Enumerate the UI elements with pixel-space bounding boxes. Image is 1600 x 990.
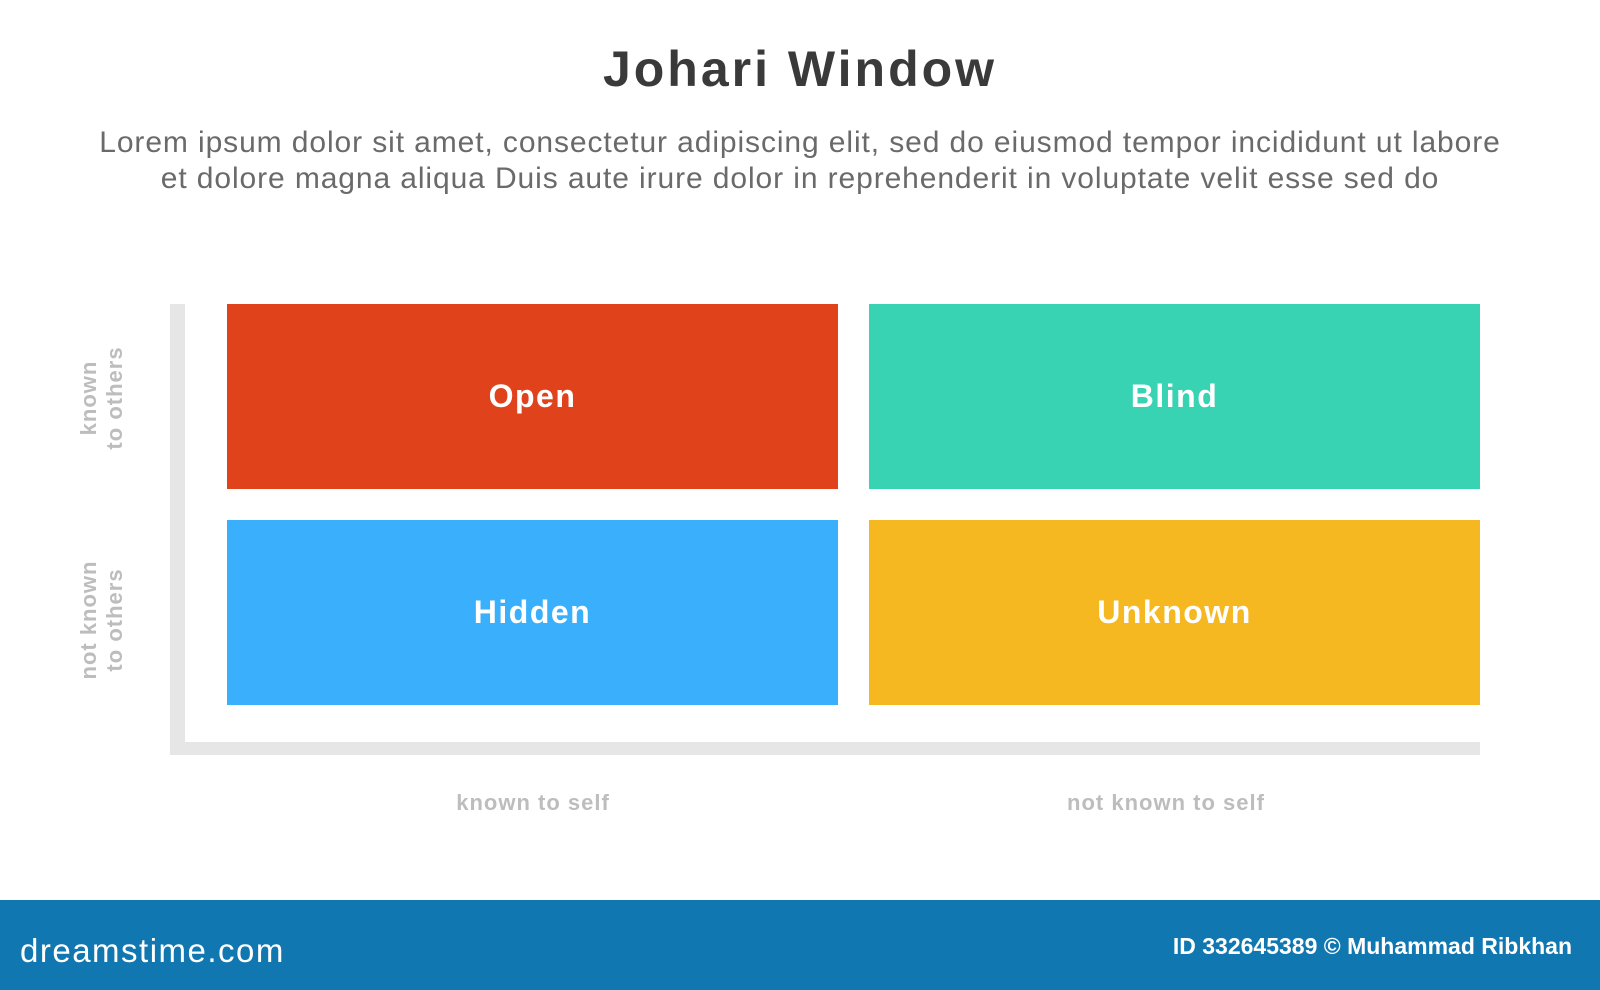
- label: not known to others: [76, 561, 127, 680]
- label: known to others: [76, 346, 127, 450]
- footer logo: dreamstime.com: [20, 932, 285, 969]
- label: not known to self: not known to self: [1067, 790, 1265, 815]
- footer: [0, 900, 1600, 990]
- box: open: Open: [489, 378, 576, 414]
- subtitle: Lorem ipsum dolor sit amet, consectetur adipiscing elit, sed do eiusmod tempor incididunt ut labore: [99, 126, 1501, 159]
- footer credit: ID 332645389 © Muhammad Ribkhan: [1173, 933, 1572, 959]
- box: hidden: Hidden: [474, 594, 591, 630]
- axis: [170, 304, 1480, 755]
- label: not known to others: not known: [76, 561, 101, 680]
- subtitle: et dolore magna aliqua Duis aute irure dolor in reprehenderit in voluptate velit esse sed do: [161, 162, 1439, 195]
- title: Johari Window: [603, 41, 997, 97]
- subtitle: [99, 126, 1501, 195]
- label: known to others: to others: [102, 346, 127, 450]
- box: unknown: [869, 520, 1480, 705]
- box: open: [227, 304, 838, 489]
- box: blind: Blind: [1131, 378, 1218, 414]
- box: hidden: [227, 520, 838, 705]
- label: known to self: known to self: [456, 790, 610, 815]
- box: blind: [869, 304, 1480, 489]
- label: known to others: known: [76, 361, 101, 435]
- box: unknown: Unknown: [1097, 594, 1252, 630]
- label: not known to others: to others: [102, 568, 127, 672]
